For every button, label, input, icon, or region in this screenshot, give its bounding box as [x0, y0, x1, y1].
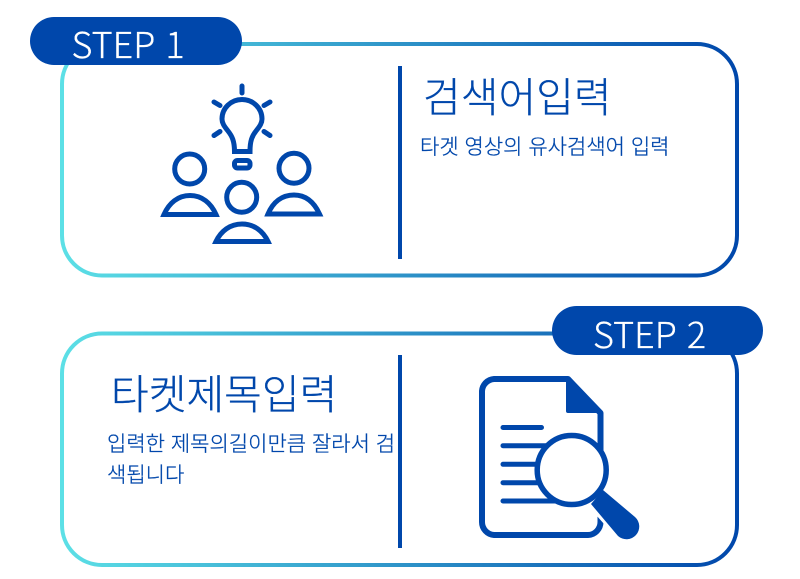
card outline: step 2 — [62, 334, 737, 565]
panel: step 1 — [30, 17, 737, 276]
text: step 2 description: 입력한 제목의길이만큼 잘라서 검 — [107, 428, 395, 458]
text: step 2 description: 색됩니다 — [107, 459, 184, 489]
icon: document with magnifier — [482, 379, 643, 543]
heading: target title input: 타켓제목입력 — [111, 361, 337, 421]
step 1 badge — [30, 17, 242, 69]
step 1 badge: STEP 1 — [72, 17, 185, 69]
icon: people sharing an idea — [164, 86, 320, 242]
panel: step 2 — [62, 306, 763, 565]
step 2 badge: STEP 2 — [593, 307, 706, 359]
heading: search term input: 검색어입력 — [423, 64, 612, 124]
text: step 1 description: 타겟 영상의 유사검색어 입력 — [420, 131, 669, 161]
divider — [398, 355, 402, 548]
card outline: step 1 — [62, 44, 737, 276]
step 2 badge — [552, 306, 763, 359]
divider — [398, 66, 402, 259]
